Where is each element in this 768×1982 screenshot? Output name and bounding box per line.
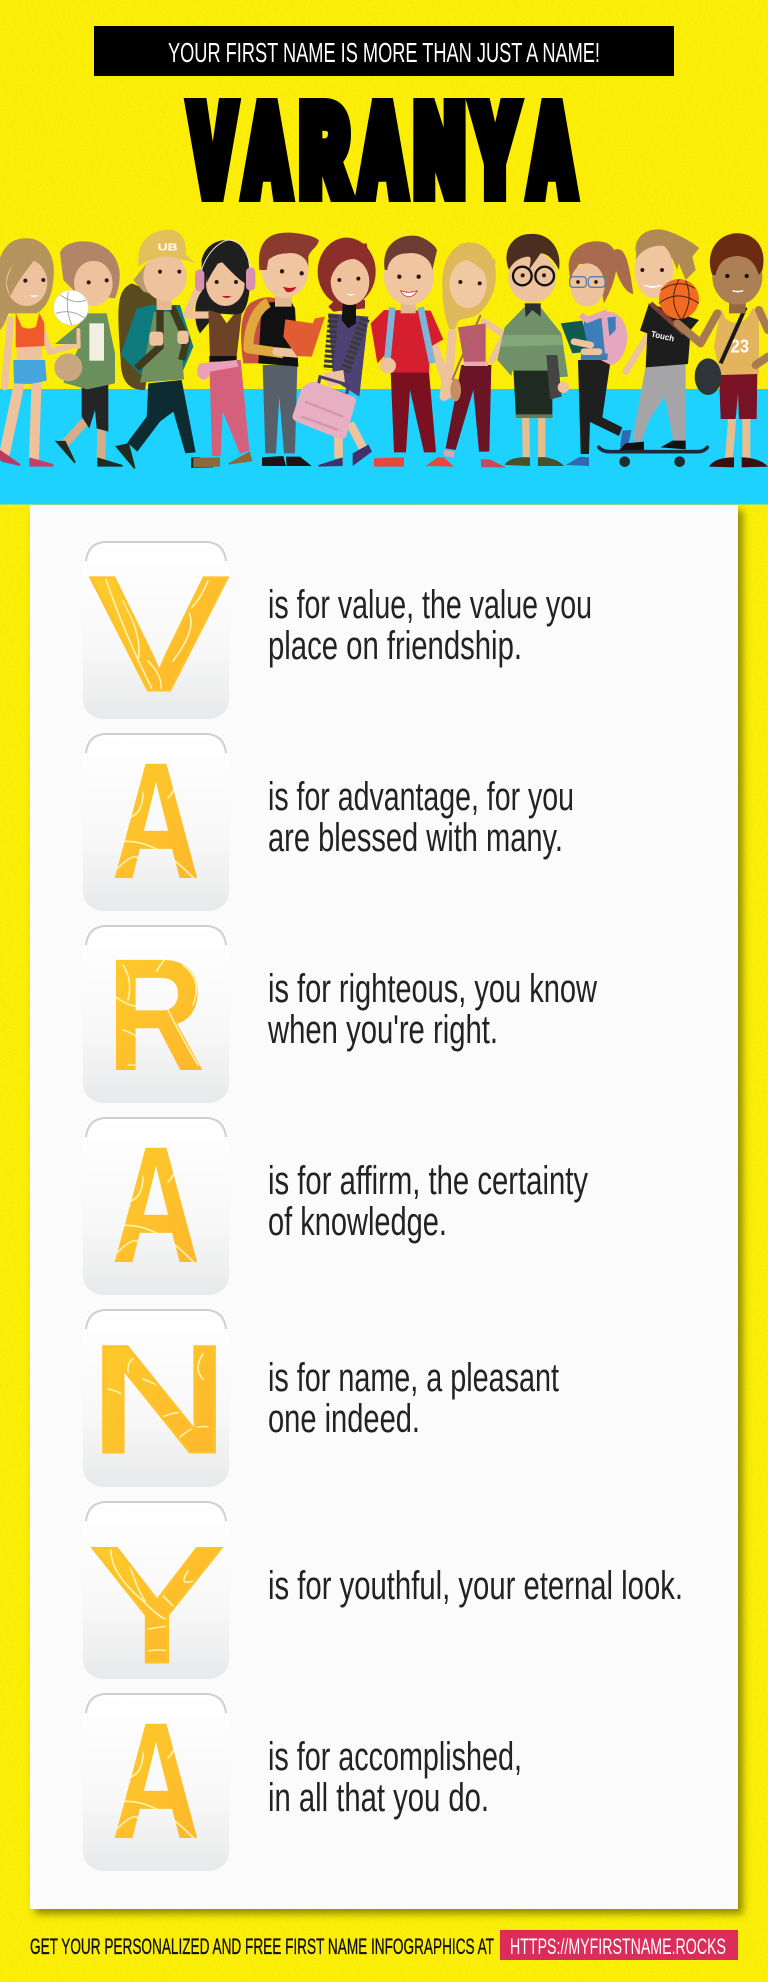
text: A line one: [268, 775, 574, 860]
blue floor band: [0, 389, 768, 504]
card A background: [83, 1693, 229, 1871]
letter Y: Y: [92, 1515, 222, 1696]
top banner: black bar with tagline: [94, 26, 674, 76]
text: N line: [268, 1356, 559, 1441]
card row 2: letter A: [83, 733, 229, 911]
text: A line one: are blessed with many.: [268, 816, 563, 860]
basketball: [659, 279, 699, 319]
title: VARANYA: V: [190, 57, 235, 228]
letter V: [88, 576, 230, 692]
title: VARANYA: A: [360, 57, 405, 229]
figure: boy with glasses: [497, 234, 569, 466]
title: VARANYA: N: [412, 59, 467, 229]
letter R: [116, 960, 202, 1070]
card row 4: letter A: [83, 1117, 229, 1295]
figure: girl in green jacket: [54, 241, 123, 467]
card row 7: letter A: [83, 1693, 229, 1871]
figure: girl with pink bag: [293, 238, 376, 467]
text: N line: one indeed.: [268, 1397, 420, 1441]
card R background: [83, 925, 229, 1103]
letter A: [114, 1724, 198, 1838]
illustration: group of twelve students: [0, 229, 768, 468]
figure: boy in tank top with bag: [677, 233, 768, 467]
text: A line two: of knowledge.: [268, 1200, 447, 1244]
text: A line three: [268, 1735, 522, 1820]
text: A line three: is for accomplished,: [268, 1735, 522, 1779]
title: VARANYA: [190, 57, 574, 229]
letter N: N: [90, 1315, 228, 1483]
text: V line: [268, 583, 592, 668]
left half of the crowd: [0, 230, 376, 468]
text: R line: when you're right.: [267, 1008, 498, 1052]
title: VARANYA: A: [529, 57, 574, 229]
figure: boy on skateboard with basketball: Touch: [650, 329, 675, 343]
figure: boy on skateboard with basketball: [599, 229, 707, 467]
figure: boy in tank top with bag: 23: [731, 335, 749, 356]
title: VARANYA: Y: [473, 58, 518, 229]
text: N line: is for name, a pleasant: [268, 1356, 559, 1400]
card A background: [83, 1117, 229, 1295]
figure: blonde girl: [442, 242, 506, 467]
letter Y: [90, 1547, 224, 1664]
title: VARANYA: R: [298, 59, 350, 229]
text: A line three: in all that you do.: [268, 1776, 489, 1820]
card V background: [83, 541, 229, 719]
letter A: [114, 764, 198, 878]
text: R line: is for righteous, you know: [268, 967, 597, 1011]
text: A line one: is for advantage, for you: [268, 775, 574, 819]
text: R line: [267, 967, 597, 1052]
figure: boy with cap and backpack: [117, 230, 213, 468]
card Y background: [83, 1501, 229, 1679]
panel: white name acrostic panel: [30, 505, 738, 1909]
figure: girl with tablet: [561, 241, 633, 466]
card row 1: letter V: [83, 541, 229, 723]
card row 5: letter N: [83, 1309, 229, 1487]
letter N: [102, 1345, 216, 1454]
right half of the crowd: [371, 229, 768, 467]
card N background: [83, 1309, 229, 1487]
card A background: [83, 733, 229, 911]
figure: girl with headphones: [187, 240, 255, 467]
footer call to action text: GET YOUR PERSONALIZED AND FREE FIRST NAME INFOGRAPHICS AT: [30, 1934, 494, 1959]
text: V line: place on friendship.: [268, 624, 522, 668]
figure: boy with cap and backpack: UB: [158, 243, 178, 254]
title: VARANYA: A: [244, 57, 289, 229]
text: V line: is for value, the value you: [268, 583, 592, 627]
text: A line two: [268, 1159, 588, 1244]
figure: boy in red shirt: [371, 236, 454, 467]
figure: boy with book: [241, 233, 325, 466]
text: A line two: is for affirm, the certainty: [268, 1159, 588, 1203]
letter A: [114, 1148, 198, 1262]
figure: girl with volleyball: [0, 238, 78, 467]
card row 3: letter R: [83, 925, 229, 1103]
letter V: V: [92, 545, 226, 723]
card row 6: letter Y: [83, 1501, 229, 1696]
